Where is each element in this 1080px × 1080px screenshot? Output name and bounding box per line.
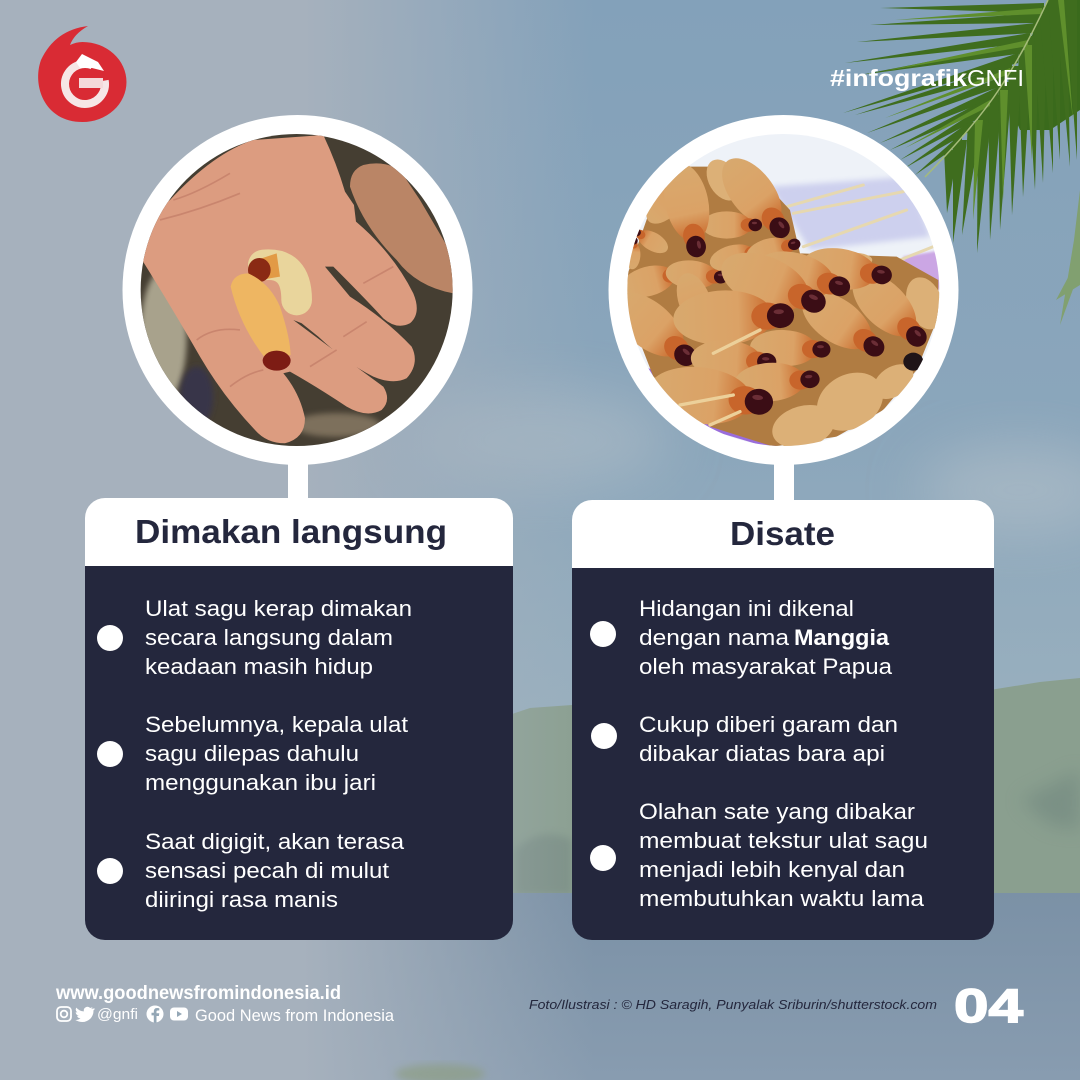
bullet 1: keadaan masih hidup (145, 654, 373, 679)
panel body (572, 568, 994, 940)
icon: facebook (146, 1006, 164, 1023)
bullet 3: menjadi lebih kenyal dan (639, 857, 905, 882)
hashtag: #infografik GNFI (830, 65, 1024, 91)
icon: youtube (170, 1008, 188, 1020)
panel: Disate (572, 500, 994, 940)
bullet 2 (591, 712, 898, 766)
icon: twitter (75, 1007, 95, 1022)
bullet 1: Hidangan ini dikenal (639, 596, 854, 621)
bullet 1 (97, 596, 412, 679)
bullet 2: sagu dilepas dahulu (145, 741, 359, 766)
bullet 3: membutuhkan waktu lama (639, 886, 925, 911)
left photo circle: hand holding sago grub (122, 115, 472, 465)
heading: Disate (730, 515, 835, 552)
icon: instagram (57, 1007, 71, 1021)
bullet 1: oleh masyarakat Papua (639, 654, 893, 679)
page number: 04 (954, 979, 1023, 1032)
footer: website and social handles: @gnfi (97, 1006, 138, 1023)
bullet 2: menggunakan ibu jari (145, 770, 376, 795)
grub body (263, 265, 297, 300)
panel: Dimakan langsung (85, 498, 513, 940)
bullet 3 (590, 799, 928, 911)
bullet 3: Saat digigit, akan terasa (145, 829, 405, 854)
footer: website and social handles: www.goodnewsfromindonesia.id (55, 983, 341, 1004)
panel header (85, 498, 513, 566)
palm leaf decoration (843, 0, 1080, 325)
bullet 2: dibakar diatas bara api (639, 741, 885, 766)
bullet 3: sensasi pecah di mulut (145, 858, 390, 883)
bullet 1: dengan nama (639, 625, 790, 650)
right photo circle: grilled sago grub satay (602, 115, 958, 465)
right hand (350, 163, 453, 293)
panel header (572, 500, 994, 568)
bullet 3: membuat tekstur ulat sagu (639, 828, 928, 853)
bullet 1 (590, 596, 893, 679)
heading: Dimakan langsung (135, 513, 447, 550)
main hand (140, 135, 417, 443)
footer: website and social handles: Good News from Indonesia (195, 1006, 395, 1025)
photo credit: Foto/Ilustrasi : © HD Saragih, Punyalak Sriburin/shutterstock.com (529, 997, 937, 1012)
panel body (85, 566, 513, 940)
bullet 2: Cukup diberi garam dan (639, 712, 898, 737)
bullet 2: Sebelumnya, kepala ulat (145, 712, 409, 737)
logo (38, 26, 126, 122)
bullet 3 (97, 829, 405, 912)
bullet 3: diiringi rasa manis (145, 887, 338, 912)
bullet 3: Olahan sate yang dibakar (639, 799, 916, 824)
bullet 1: Ulat sagu kerap dimakan (145, 596, 412, 621)
footer: website and social handles (55, 983, 395, 1025)
bullet 1: Manggia (794, 625, 889, 650)
bullet 2 (97, 712, 409, 795)
connector stems (288, 455, 794, 505)
bullet 1: secara langsung dalam (145, 625, 393, 650)
